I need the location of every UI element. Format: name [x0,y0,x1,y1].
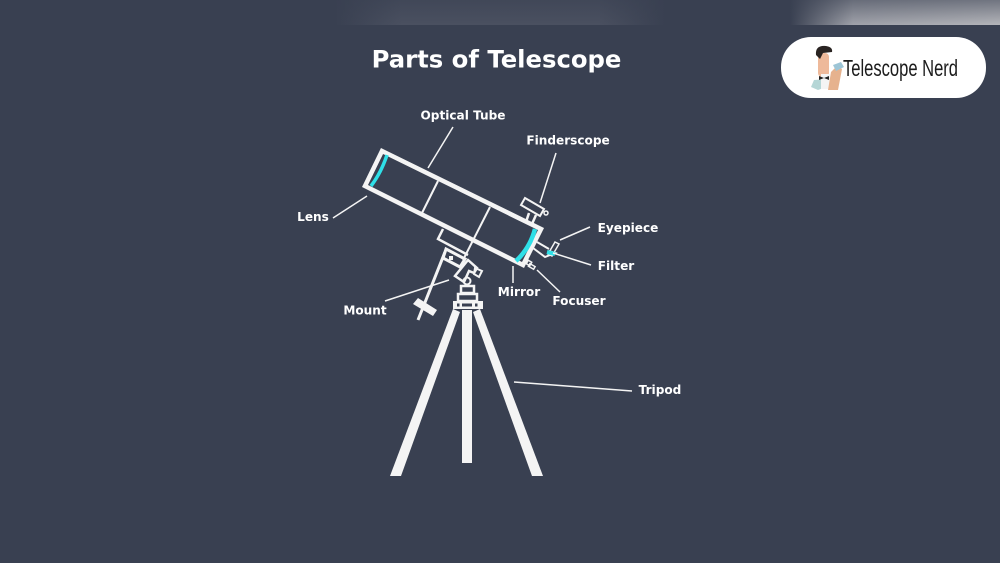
mount [413,207,490,320]
label: Focuser: Focuser [552,294,606,308]
label: Finderscope: Finderscope [526,134,610,148]
leader lines [333,127,632,391]
title: Parts of Telescope [372,44,621,74]
mirror [516,229,535,261]
label: Filter: Filter [598,259,634,273]
lens [371,155,387,186]
tripod [390,278,543,476]
label: Optical Tube: Optical Tube [421,108,505,122]
label: Mount: Mount [343,304,387,318]
label: Mirror: Mirror [498,285,540,299]
finderscope [521,198,548,224]
icon: cartoon man with telescope [811,46,844,90]
telescope [365,151,559,476]
focuser [526,260,535,269]
optical tube [365,151,541,265]
label: Eyepiece: Eyepiece [598,221,658,235]
tube dividers [422,181,438,213]
label: Lens: Lens [297,210,329,224]
logo badge [781,37,986,98]
eyepiece and filter [533,242,559,257]
label: Tripod: Tripod [639,383,681,397]
blurred top strip [335,0,1000,25]
counterweight [413,298,437,316]
logo wordmark: Telescope Nerd [843,55,958,81]
